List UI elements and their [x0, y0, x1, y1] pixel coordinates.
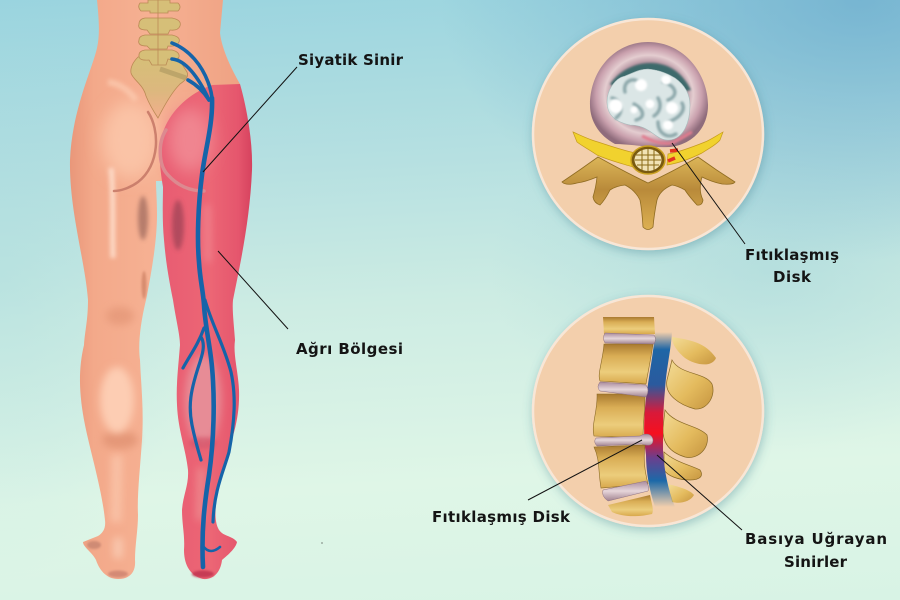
- sciatic nerve branches: [172, 43, 234, 567]
- vertebrae bodies: [593, 317, 655, 516]
- left leg and torso skin: [70, 0, 240, 579]
- panel: disc cross-section circle: [533, 19, 763, 249]
- buttock creases: [114, 112, 204, 191]
- vertebral bone arch: [562, 157, 735, 230]
- small dot: [321, 542, 323, 544]
- label: Basıya Uğrayan Sinirler: [745, 530, 887, 571]
- circle background: [533, 19, 763, 249]
- spinal cord: [631, 146, 665, 174]
- label: Basıya Uğrayan Sinirler: Sinirler: [784, 553, 848, 571]
- yellow nerve roots: [573, 132, 723, 167]
- spinal nerve cord compressed: [644, 332, 675, 507]
- disc nucleus: [607, 69, 690, 140]
- pain region: red right leg: [160, 84, 252, 579]
- leader lines: [203, 67, 745, 530]
- circle background: [533, 296, 763, 526]
- skin shading: [87, 82, 158, 578]
- body figure: back view of legs and hips: [70, 0, 252, 579]
- herniated disc: [595, 434, 653, 446]
- label: Fıtıklaşmış Disk top: Fıtıklaşmış: [745, 246, 839, 264]
- pain region shading: [168, 108, 221, 578]
- label: Fıtıklaşmış Disk top: Disk: [773, 268, 812, 286]
- intervertebral discs: [595, 333, 656, 501]
- sacrum: [131, 57, 188, 118]
- spine vertebrae: [131, 0, 188, 118]
- label: Ağrı Bölgesi: Ağrı Bölgesi: [296, 340, 403, 358]
- panel: spine side view circle: [533, 296, 763, 526]
- label: Basıya Uğrayan Sinirler: Basıya Uğrayan: [745, 530, 887, 548]
- posterior processes: [663, 337, 716, 503]
- label: Siyatik Sinir: Siyatik Sinir: [298, 51, 404, 69]
- label: Fıtıklaşmış Disk top: [745, 246, 839, 286]
- label: Fıtıklaşmış Disk bottom: Fıtıklaşmış Disk: [432, 508, 571, 526]
- herniated disc: [590, 42, 708, 147]
